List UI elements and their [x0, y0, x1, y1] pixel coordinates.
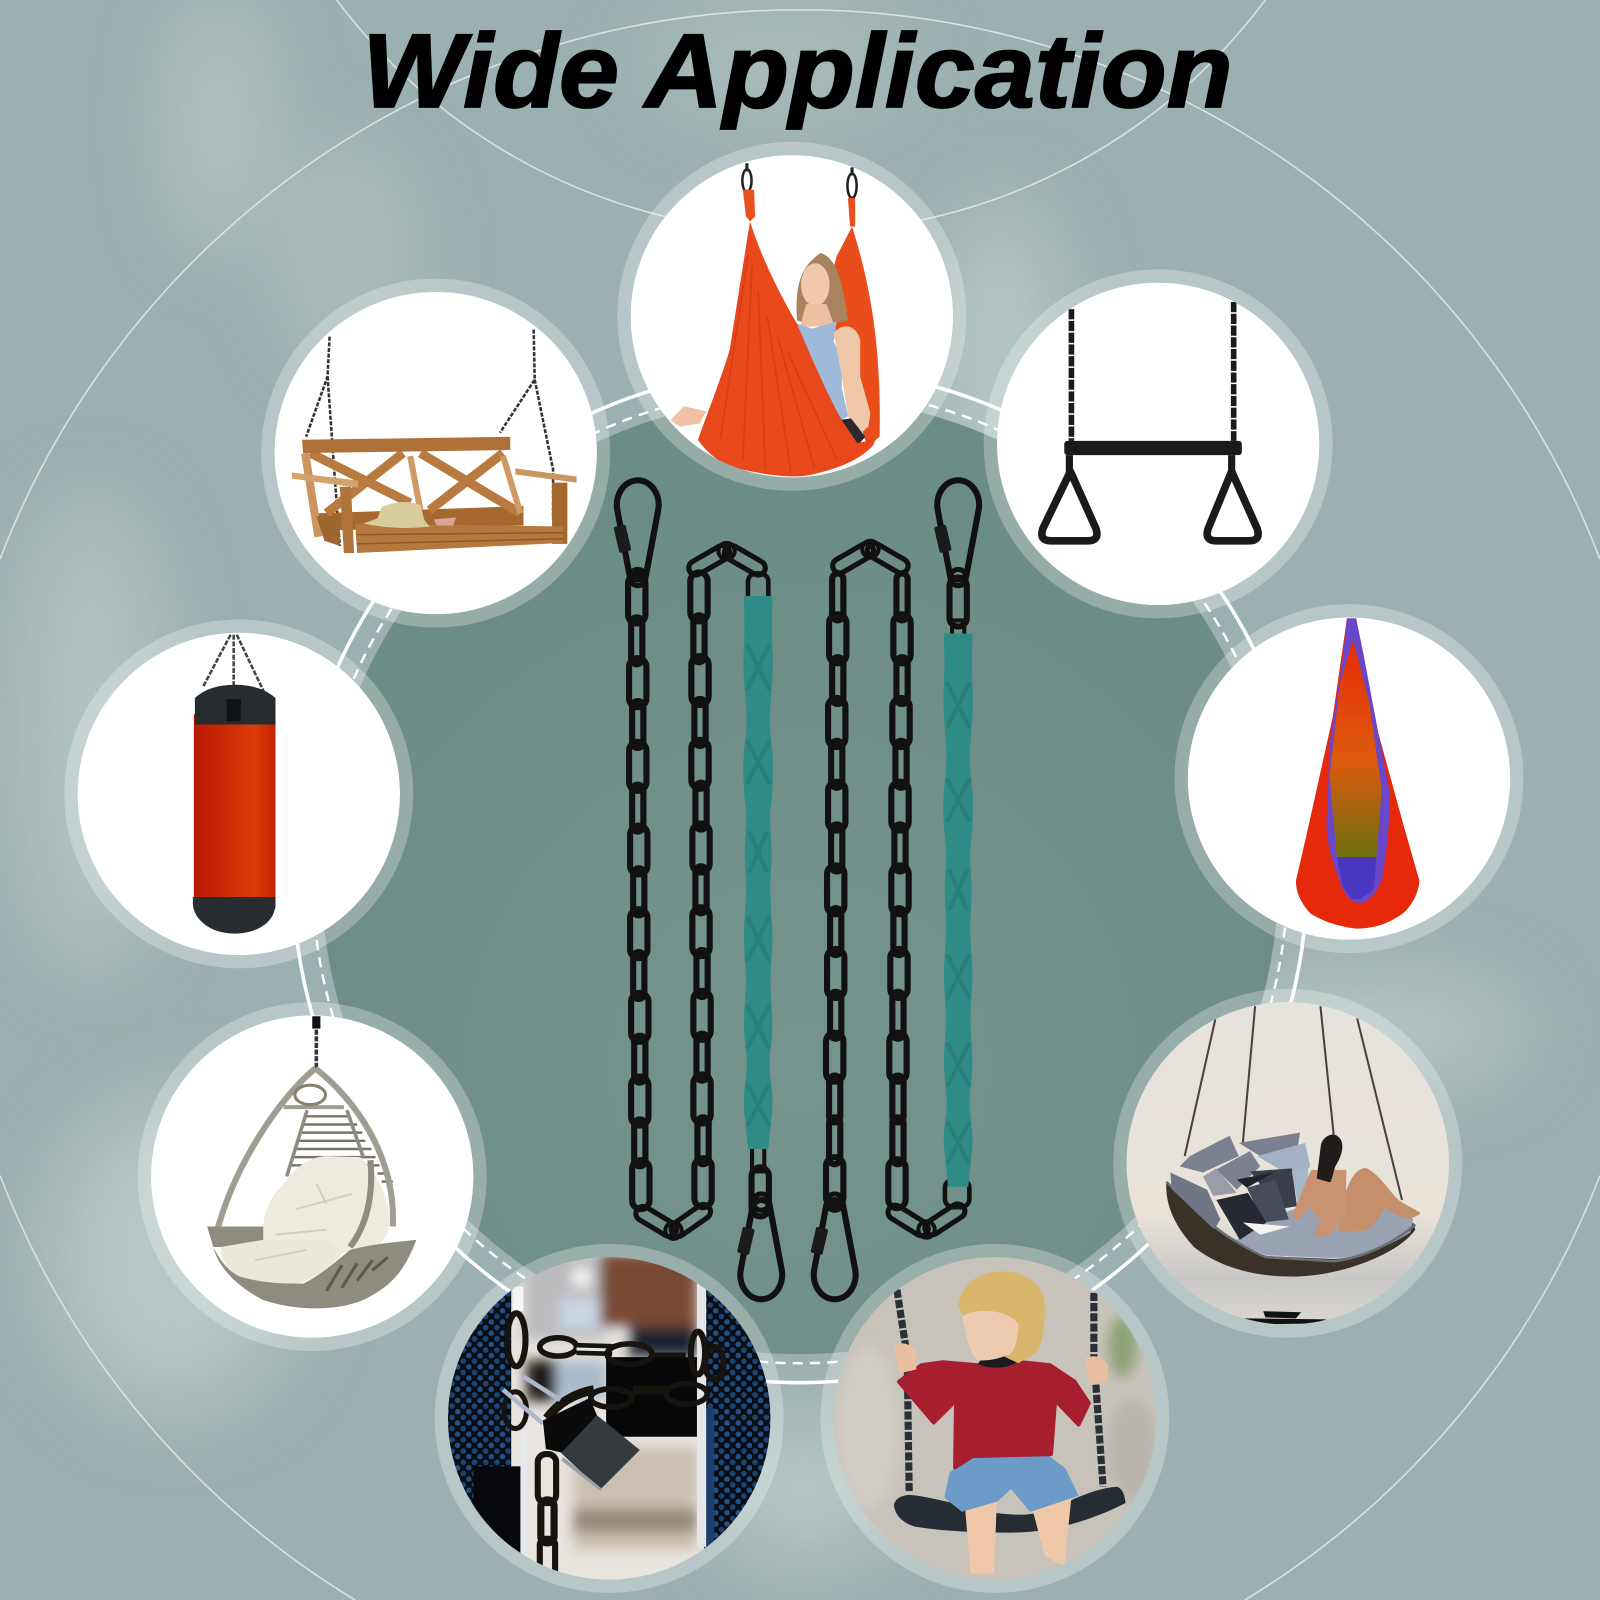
- carabiner top right: [934, 480, 979, 586]
- title: Wide Application: [362, 13, 1233, 130]
- chain strand 2: [690, 572, 712, 1207]
- top rail: [302, 437, 510, 453]
- seat: [316, 516, 340, 546]
- photo: trapeze bar with rings: [997, 283, 1319, 605]
- seat: [894, 1487, 1126, 1533]
- chains product: [613, 480, 979, 1299]
- right band: [834, 226, 880, 442]
- back seat board: [318, 506, 523, 531]
- central dark disc: [321, 397, 1279, 1354]
- photo: hanging daybed: [1122, 1000, 1459, 1327]
- photo: aerial yoga hammock: [631, 155, 953, 478]
- sweater: [899, 1362, 1089, 1467]
- chain strand 1: [628, 574, 649, 1209]
- woman on daybed: [1294, 1136, 1418, 1235]
- carabiner bottom left: [737, 1194, 782, 1299]
- photo: red hanging pod: [1188, 617, 1510, 940]
- connector arcs: [293, 368, 1307, 1383]
- chain strand 4: [888, 573, 911, 1208]
- carabiner bottom right: [810, 1194, 856, 1299]
- braces: [310, 453, 520, 513]
- photo: child on swing: [827, 1250, 1163, 1587]
- padlock: [543, 1398, 597, 1453]
- basket: [207, 1227, 263, 1247]
- cushion: [263, 1156, 390, 1253]
- basket: [1166, 1183, 1415, 1277]
- woman: [797, 253, 870, 446]
- hat: [363, 502, 430, 528]
- carabiner top left: [613, 480, 659, 586]
- main sling: [698, 221, 876, 476]
- padded sleeve left: [744, 597, 772, 1148]
- pillows: [1170, 1133, 1310, 1240]
- head: [958, 1271, 1045, 1363]
- photo: wooden porch swing: [274, 292, 597, 614]
- chains: [504, 1313, 723, 1580]
- legs: [965, 1497, 1071, 1573]
- photo: punching bag: [78, 633, 400, 955]
- chain bends: [633, 541, 968, 1239]
- chain strand 3: [826, 573, 846, 1206]
- slatted back: [291, 1116, 393, 1182]
- cushion: [1237, 1203, 1413, 1258]
- padded sleeve right: [944, 635, 972, 1186]
- arms: [292, 472, 358, 488]
- photo: egg hanging chair: [151, 1015, 473, 1338]
- shorts: [946, 1451, 1077, 1510]
- photo: chained padlock: [448, 1257, 770, 1580]
- connector links: [748, 573, 969, 1216]
- frame: [216, 1068, 393, 1234]
